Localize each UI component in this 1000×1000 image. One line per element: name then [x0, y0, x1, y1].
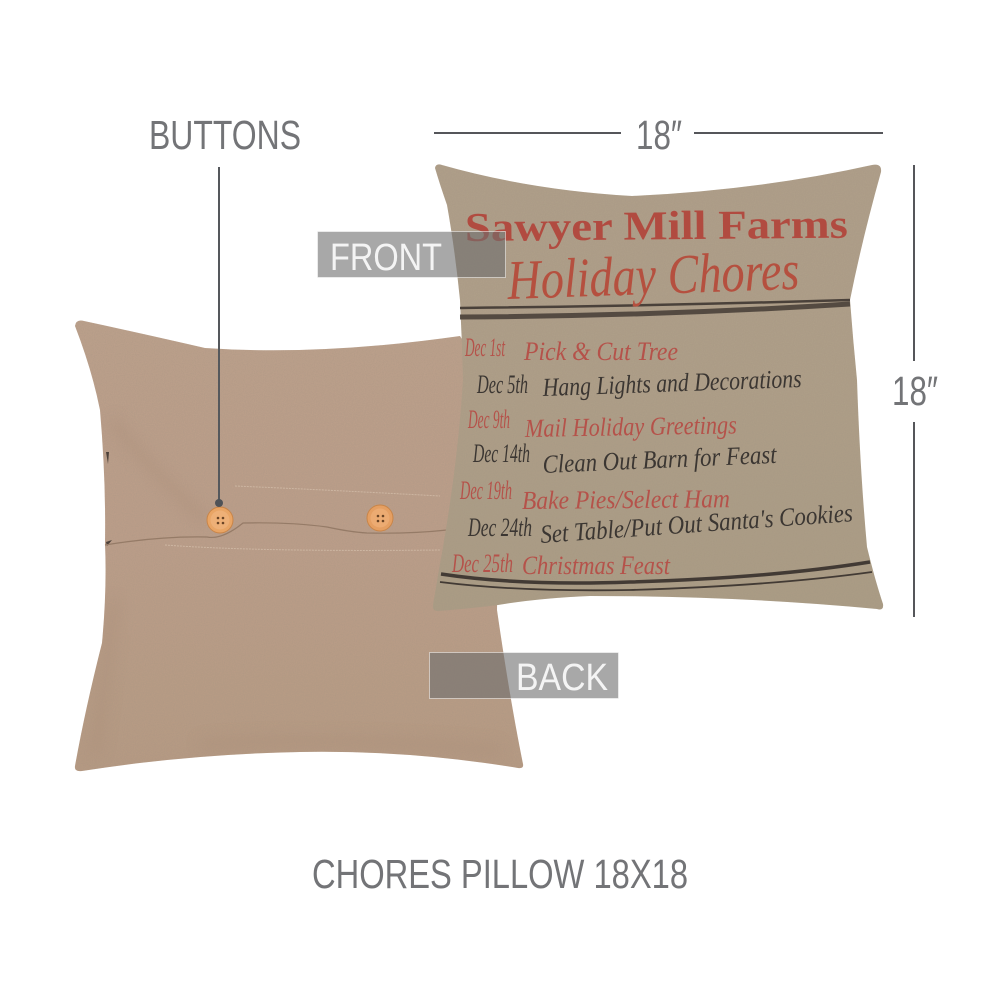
row: Dec 25th: [451, 549, 671, 580]
heading: Holiday Chores: Holiday Chores: [505, 240, 800, 312]
row: Dec 9th: [467, 405, 737, 443]
row: Dec 14th: Clean Out Barn for Feast: [542, 440, 778, 479]
row: Dec 1st: Pick & Cut Tree: [523, 337, 678, 366]
row: Dec 1st: Dec 1st: [464, 333, 505, 362]
callout: BUTTONS: BUTTONS: [149, 112, 301, 158]
row: Dec 5th: Hang Lights and Decorations: [541, 364, 802, 402]
row: Dec 24th: [467, 498, 854, 549]
row: Dec 19th: Bake Pies/Select Ham: [522, 484, 730, 515]
top stripes: [460, 300, 850, 317]
dimension: width 18 inches: 18″: [636, 112, 682, 158]
label: BACK: BACK: [516, 657, 608, 699]
row: Dec 5th: Dec 5th: [476, 370, 528, 399]
row: Dec 14th: [472, 439, 778, 479]
dimension: height 18 inches: 18″: [892, 368, 938, 414]
chore list: [451, 333, 854, 580]
row: Dec 19th: [459, 476, 730, 515]
button left: [207, 507, 233, 533]
callout: BUTTONS: [149, 112, 301, 507]
button right: [367, 505, 393, 531]
bottom stripes: [440, 562, 872, 590]
row: Dec 24th: Set Table/Put Out Santa's Cookies: [539, 498, 854, 549]
row: Dec 9th: Mail Holiday Greetings: [524, 410, 737, 443]
row: Dec 24th: Dec 24th: [467, 513, 532, 542]
row: Dec 5th: [476, 364, 802, 402]
row: Dec 9th: Dec 9th: [467, 405, 510, 434]
front pillow: [433, 164, 883, 611]
heading: Sawyer Mill Farms: Sawyer Mill Farms: [465, 201, 848, 250]
label: FRONT: [318, 232, 506, 279]
row: Dec 1st: [464, 333, 678, 366]
label: FRONT: FRONT: [330, 237, 442, 279]
row: Dec 14th: Dec 14th: [472, 439, 530, 468]
row: Dec 19th: Dec 19th: [459, 476, 512, 505]
title: CHORES PILLOW 18X18: [312, 851, 688, 897]
row: Dec 25th: Christmas Feast: [522, 551, 671, 580]
row: Dec 25th: Dec 25th: [451, 549, 513, 578]
label: BACK: [430, 652, 618, 699]
back pillow: [75, 321, 523, 771]
